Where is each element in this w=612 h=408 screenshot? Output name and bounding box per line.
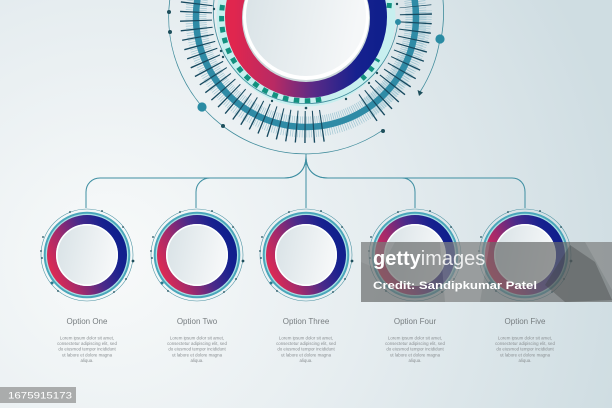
option five text: aliqua. [519,358,531,363]
image id tag [0,387,76,403]
option three text: aliqua. [300,358,312,363]
option two [150,209,244,363]
option three circle [259,209,353,301]
gradient ring [234,0,378,89]
option one text: ut labore et dolore magna [62,352,113,357]
option one circle [40,209,134,301]
option five heading: Option Five [505,317,546,326]
option five [478,209,572,363]
main tech circle [167,0,445,154]
option five text: do eiusmod tempor incididunt [496,347,554,352]
central disc [242,0,370,82]
option four text: Lorem ipsum dolor sit amet, [388,336,442,340]
option two text: do eiusmod tempor incididunt [168,347,226,352]
outer arc with nodes [169,0,444,154]
option four text: ut labore et dolore magna [390,352,441,357]
watermark credit: Credit: Sandipkumar Patel [373,280,537,292]
option two text: aliqua. [191,358,203,363]
watermark logo: gettyimages [373,248,485,270]
option two text: Lorem ipsum dolor sit amet, [170,336,224,340]
fine ticks upper right [368,10,422,108]
nodes and dots [167,3,445,133]
option two text: ut labore et dolore magna [172,352,223,357]
option four circle [368,209,462,301]
option three [259,209,353,363]
option five circle [478,209,572,301]
inner cyan band [221,0,391,102]
option four [368,209,462,363]
option three text: consectetur adipiscing elit, sed [276,341,336,346]
teal square ticks [222,0,390,101]
option one text: consectetur adipiscing elit, sed [57,341,117,346]
option one text: aliqua. [81,358,93,363]
option two heading: Option Two [177,317,218,326]
option three text: ut labore et dolore magna [281,352,332,357]
option five text: consectetur adipiscing elit, sed [495,341,555,346]
arrowhead [418,90,423,96]
option one text: do eiusmod tempor incididunt [58,347,116,352]
thin inner arc [213,0,398,104]
option four text: do eiusmod tempor incididunt [386,347,444,352]
watermark banner [361,242,612,302]
option five text: Lorem ipsum dolor sit amet, [498,336,552,340]
fine tick band [196,0,416,127]
option one text: Lorem ipsum dolor sit amet, [60,336,114,340]
option one heading: Option One [67,317,108,326]
option four text: consectetur adipiscing elit, sed [385,341,445,346]
option four text: aliqua. [409,358,421,363]
option three text: Lorem ipsum dolor sit amet, [279,336,333,340]
option three heading: Option Three [283,317,330,326]
image id tag: 1675915173 [8,390,72,402]
option four heading: Option Four [394,317,436,326]
dark radial ticks [196,0,416,127]
connector lines [86,154,525,208]
option one [40,209,134,363]
option five text: ut labore et dolore magna [500,352,551,357]
option two text: consectetur adipiscing elit, sed [167,341,227,346]
option three text: do eiusmod tempor incididunt [277,347,335,352]
option two circle [150,209,244,301]
thick teal ring [196,0,416,127]
